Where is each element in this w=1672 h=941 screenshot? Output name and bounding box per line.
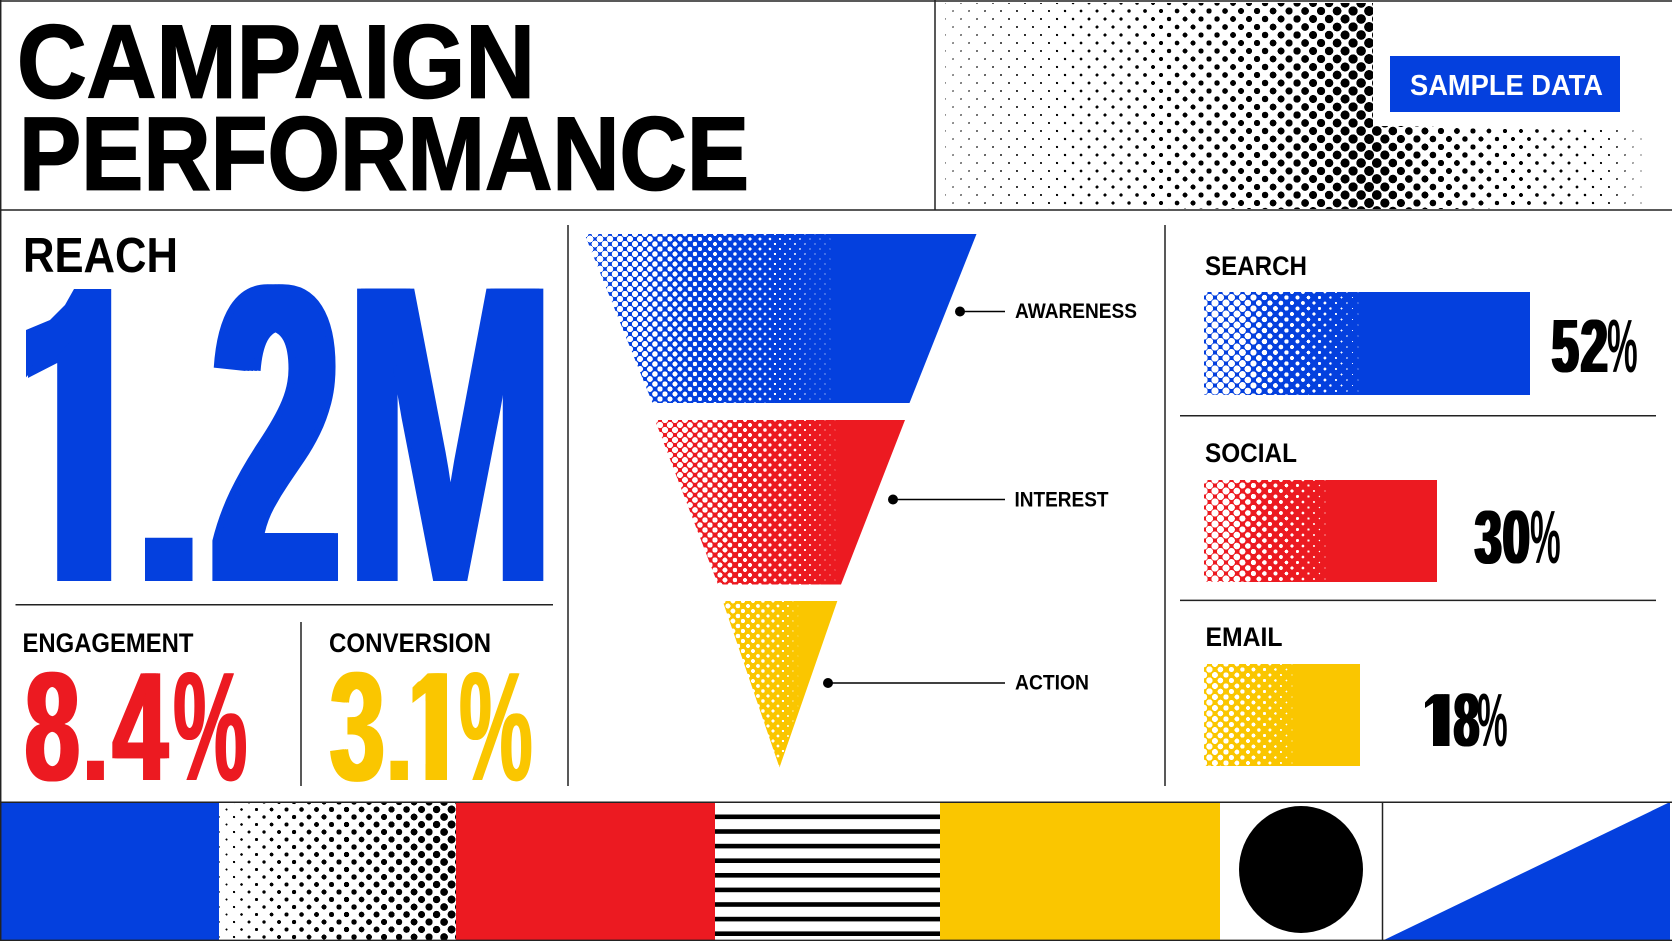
reach value: 1 (18, 197, 149, 672)
email value: 8 (1454, 678, 1479, 762)
title: CAMPAIGN (17, 4, 535, 120)
social value: % (1530, 494, 1561, 578)
title (17, 4, 749, 210)
reach value: 2 (212, 197, 340, 672)
bar: email 18% (1204, 664, 1360, 766)
email value: % (1477, 678, 1508, 762)
title: PERFORMANCE (19, 96, 749, 210)
bottom strip: blue block (0, 802, 219, 941)
engagement value (25, 640, 247, 813)
funnel tier: action (722, 600, 838, 768)
email value (1425, 678, 1508, 762)
funnel tier: awareness (584, 234, 976, 403)
social value: 0 (1503, 494, 1529, 578)
engagement value: 4 (113, 640, 168, 813)
engagement value: 8 (25, 640, 79, 813)
search value: % (1607, 304, 1638, 388)
bottom strip: blue triangle (1384, 803, 1670, 940)
callout: awareness (955, 300, 1137, 323)
reach value (26, 197, 556, 672)
engagement value: % (172, 640, 247, 813)
reach value: . (109, 197, 227, 672)
conversion value: 3 (330, 640, 384, 813)
header halftone pattern (945, 3, 1642, 209)
search value: 5 (1552, 304, 1578, 388)
bar: search 52% (1204, 292, 1530, 395)
funnel tier: interest (655, 420, 905, 584)
conversion value: % (459, 640, 533, 813)
reach value: M (344, 197, 556, 672)
search value (1552, 304, 1638, 388)
callout: action (823, 672, 1089, 695)
social value (1474, 494, 1561, 578)
social value: 3 (1475, 494, 1501, 578)
bottom strip: black circle (1239, 806, 1363, 933)
bottom strip: black stripes (715, 814, 940, 936)
bottom strip: dot pattern (219, 802, 456, 941)
conversion value: . (382, 640, 416, 813)
callout: interest (888, 489, 1109, 512)
conversion value: 1 (409, 640, 463, 813)
engagement value: . (78, 640, 113, 813)
bar: social 30% (1204, 480, 1437, 582)
search value: 2 (1581, 304, 1607, 388)
bottom strip: yellow block (940, 802, 1220, 941)
conversion value (330, 640, 533, 813)
sample data label: SAMPLE DATA (1410, 70, 1603, 102)
email value: 1 (1428, 678, 1454, 762)
bottom strip: red block (456, 802, 715, 941)
sample data badge (1390, 56, 1620, 112)
